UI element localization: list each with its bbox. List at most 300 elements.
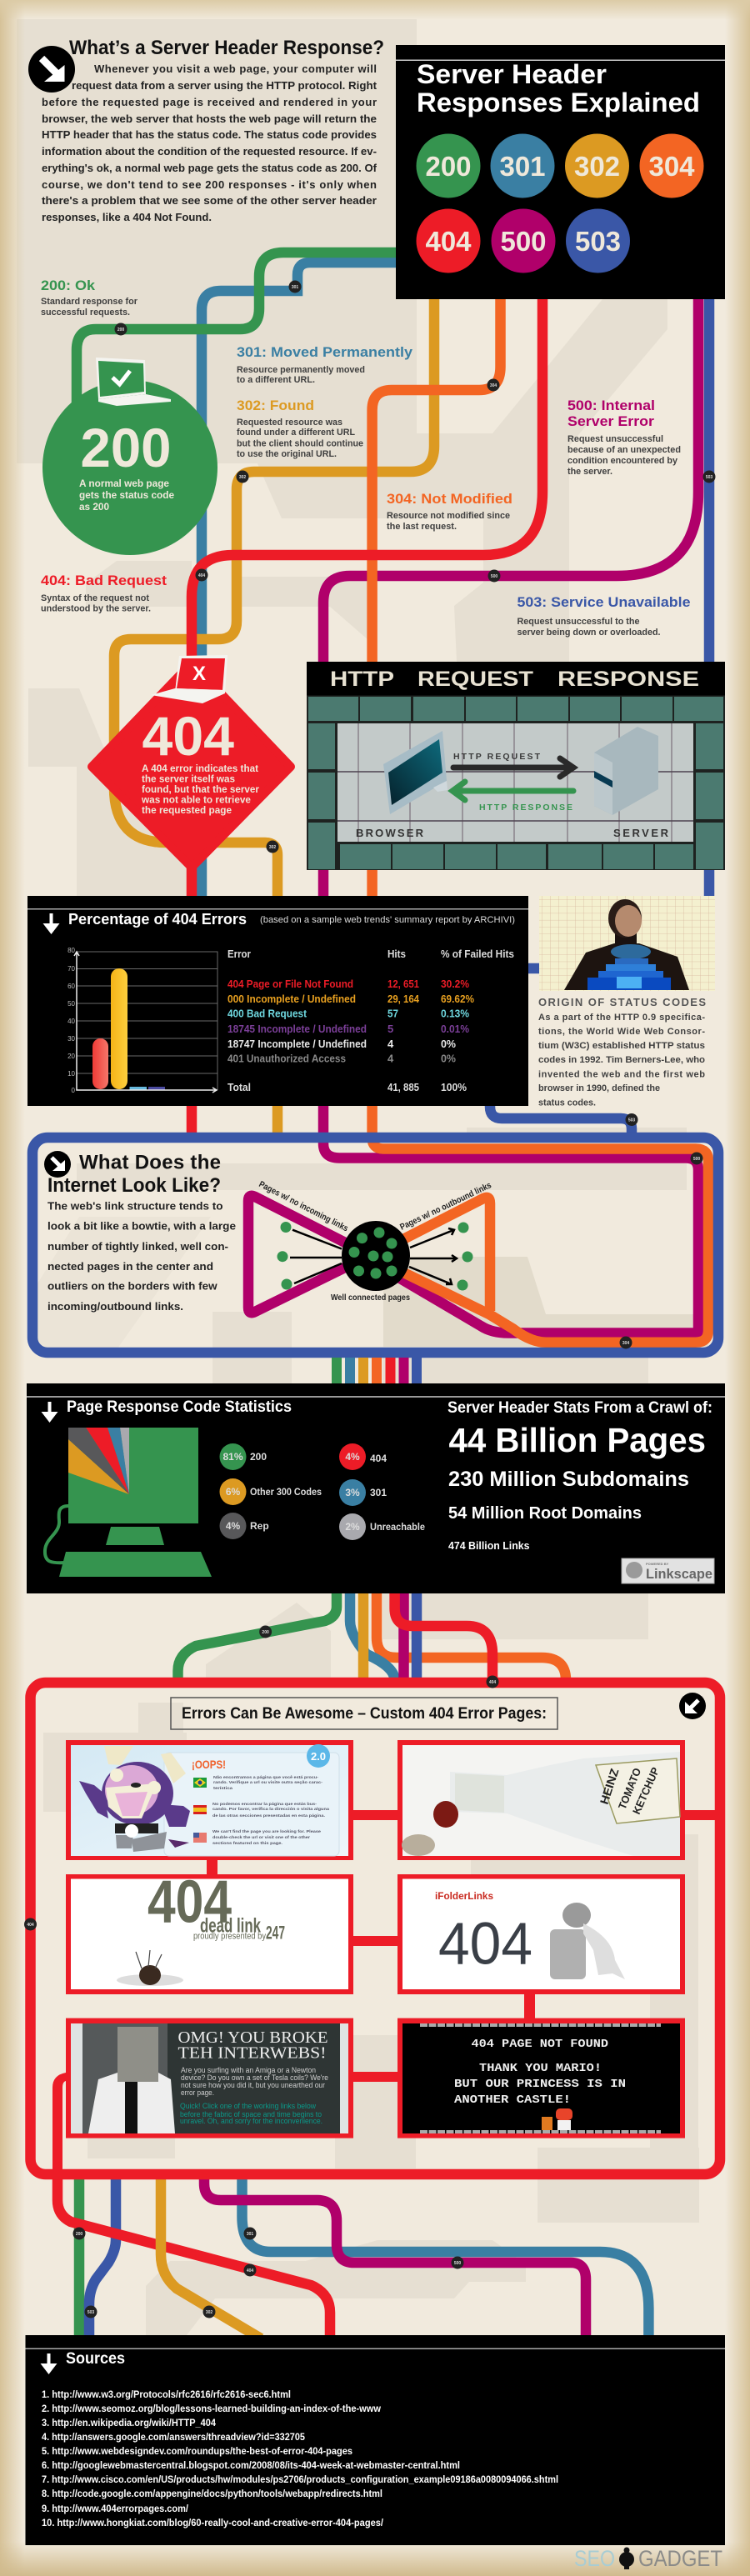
text block: 302 found: found under a different URL	[237, 428, 355, 438]
bar chart: 20	[68, 1053, 76, 1060]
text block: 304 not modified: 304: Not Modified	[387, 491, 512, 507]
data table: 30.2%	[441, 978, 469, 990]
text block: 301 moved permanently: Resource permanently moved	[237, 365, 365, 375]
station 200 mid: 200	[262, 1630, 269, 1635]
badge 500	[492, 208, 555, 273]
source list: 2. http://www.seomoz.org/blog/lessons-learned-building-an-index-of-the-www	[42, 2403, 382, 2414]
station 503 top	[703, 470, 715, 483]
icon: down-left arrow circle	[679, 1693, 706, 1719]
subway line: 500 magenta section	[323, 296, 698, 1333]
station 302 lower	[203, 2305, 215, 2318]
station 404 lower	[243, 2263, 257, 2277]
source list: 9. http://www.404errorpages.com/	[42, 2503, 189, 2514]
data table: 0%	[441, 1052, 456, 1065]
tile border	[308, 697, 723, 869]
intro body text: responses, like a 404 Not Found.	[42, 211, 212, 223]
paragraph	[181, 2066, 328, 2098]
data table: 401 Unauthorized Access	[228, 1052, 346, 1065]
logo: SEO Gadget: GADGET	[638, 2546, 722, 2571]
teal paragraph: Quick! Click one of the working links below	[180, 2102, 316, 2111]
icon: down arrow	[42, 1402, 58, 1423]
legend: rep: 4%	[226, 1520, 241, 1532]
text block: 301 moved permanently	[237, 344, 413, 385]
text: Spanish: de las otras secciones presentadas en esta página.	[212, 1813, 325, 1818]
station 404 lower: 404	[247, 2268, 253, 2273]
legend: 404: 4%	[345, 1451, 360, 1463]
subway line: 200 green top section	[77, 253, 400, 417]
badge 503: 503	[575, 226, 621, 257]
data table: 57	[388, 1007, 398, 1020]
data table: 404 Page or File Not Found	[228, 978, 353, 990]
stat: links: 474 Billion Links	[448, 1539, 530, 1552]
text block: 200 ok: 200: Ok	[41, 278, 96, 293]
text: Portuguese	[213, 1775, 323, 1790]
station 500 in frame: 500	[693, 1157, 700, 1162]
bar chart: 60	[68, 983, 76, 990]
text: Portuguese: terística	[213, 1786, 233, 1790]
data table: Error	[228, 948, 251, 960]
text block: 304 not modified: Resource not modified since	[387, 511, 510, 521]
intro body text: course, we don't tend to see 200 responses - it's only when	[42, 178, 377, 191]
logo: linkscape	[622, 1558, 714, 1583]
intro body text: browser, the web server that hosts the web page will return the	[42, 113, 377, 125]
arrow: http response	[452, 782, 573, 813]
panel heading: REQUEST	[418, 668, 533, 691]
icon: down-right arrow circle	[28, 46, 75, 93]
sprites: mario and toad	[542, 2108, 572, 2130]
source list: 8. http://code.google.com/appengine/docs/python/tools/webapp/redirects.html	[42, 2488, 382, 2499]
image: mario princess castle: 404 PAGE NOT FOUND	[472, 2038, 608, 2051]
section body text	[48, 1200, 236, 1313]
bottle cap	[402, 1834, 435, 1856]
label: well connected: Well connected pages	[331, 1293, 410, 1303]
section body text: The web's link structure tends to	[48, 1200, 223, 1212]
bar chart: 0	[72, 1087, 76, 1094]
station 200 top	[115, 323, 127, 335]
source list: 3. http://en.wikipedia.org/wiki/HTTP_404	[42, 2417, 216, 2428]
source list	[42, 2388, 558, 2528]
panel: server header responses explained	[396, 45, 725, 299]
image: monster error page	[66, 1740, 353, 1860]
station 404 on frame top	[487, 1675, 498, 1688]
text block: 500 internal server error: the server.	[568, 467, 612, 477]
image: heinz ketchup bottle	[398, 1740, 685, 1860]
bar chart: 80	[68, 947, 76, 954]
legend: 301: 301	[370, 1487, 387, 1498]
image: dead link 404 fly: 247	[266, 1922, 285, 1943]
image: iFolderLinks 404 baby: 404	[438, 1912, 532, 1977]
text block: 304 not modified: the last request.	[387, 522, 457, 532]
chart: monitor pie	[45, 1428, 212, 1577]
left arrows	[290, 1230, 342, 1283]
headline line two: TEH INTERWEBS!	[178, 2043, 327, 2062]
intro body text	[42, 63, 378, 223]
legend: unreachable	[339, 1513, 425, 1540]
icon: rider silhouette	[619, 2547, 634, 2569]
intro: what's a server header response	[28, 37, 384, 223]
flag: USA	[193, 1833, 207, 1843]
text: Portuguese: Não encontramos a página que você está procu-	[213, 1775, 319, 1779]
station 301 top	[288, 280, 302, 293]
text: English	[212, 1829, 322, 1845]
intro body text: Whenever you visit a web page, your computer will	[94, 63, 377, 75]
station 304 in frame	[620, 1337, 632, 1348]
callout: red 404 diamond with laptop	[92, 655, 291, 868]
text block: 301 moved permanently: to a different URL.	[237, 375, 315, 385]
data table	[228, 948, 514, 1093]
text block: 200 ok: successful requests.	[41, 308, 130, 318]
subway line: 503 blue section	[704, 296, 714, 900]
text block: origin of status codes: tium (W3C) established HTTP status	[538, 1041, 705, 1051]
text block: origin of status codes: tions, the World Wide Web Consor-	[538, 1027, 705, 1037]
icon: down arrow	[43, 913, 60, 934]
icon: laptop with check	[96, 358, 171, 406]
station 200 top: 200	[118, 328, 124, 333]
text: Spanish	[212, 1802, 330, 1818]
badge 302	[565, 133, 629, 198]
stat: subdomains: 230 Million Subdomains	[448, 1468, 689, 1491]
data table: Hits	[388, 948, 406, 960]
source list: 10. http://www.hongkiat.com/blog/60-really-cool-and-creative-error-404-pages/	[42, 2517, 384, 2528]
lines below stats panel	[178, 1588, 566, 1680]
station 500 in frame	[690, 1152, 703, 1165]
legend: other 300	[220, 1478, 322, 1505]
data table: 000 Incomplete / Undefined	[228, 993, 356, 1005]
icon: browser monitor	[383, 731, 448, 814]
panel heading	[330, 668, 699, 691]
arrow: http response: HTTP RESPONSE	[479, 803, 572, 813]
text block: 302 found: to use the original URL.	[237, 449, 337, 459]
section heading	[48, 1152, 221, 1197]
heading: sources: Sources	[66, 2350, 125, 2368]
illustration: purple monster	[79, 1746, 190, 1852]
panel: custom 404 error pages frame	[24, 1675, 720, 2179]
arrow: http request	[453, 752, 573, 777]
text: English: double-check the url or visit one of the other	[212, 1835, 310, 1839]
callout: green 200 circle with laptop: 200	[80, 417, 172, 478]
callout: red 404 diamond with laptop: 404	[142, 705, 234, 767]
callout: red 404 diamond with laptop: the server itself was	[142, 773, 235, 785]
panel: percentage of 404 errors	[28, 896, 528, 1106]
panel title	[417, 59, 700, 118]
text block: origin of status codes: invented the web and the first web	[538, 1070, 705, 1080]
text block: 404 bad request	[41, 573, 167, 613]
text block: 404 bad request: understood by the server.	[41, 603, 151, 613]
station 301 lower: 301	[247, 2232, 253, 2237]
text block: 200 ok: Standard response for	[41, 297, 138, 307]
data table: % of Failed Hits	[441, 948, 514, 960]
station 302 top: 302	[239, 475, 246, 480]
badge 301	[490, 133, 555, 198]
legend: rep	[220, 1513, 269, 1539]
station 302 top	[237, 470, 248, 483]
text: Portuguese: rando. Verifique a url ou visite outra seção carac-	[213, 1780, 323, 1784]
station 200 mid	[259, 1625, 272, 1638]
bar chart: 70	[68, 965, 76, 973]
callout: red 404 diamond with laptop: was not able to retrieve	[141, 793, 251, 805]
badge 304: 304	[648, 151, 695, 182]
lines below red frame	[58, 2177, 648, 2338]
text block: 500 internal server error	[568, 398, 681, 477]
image: dead link 404 fly: dead link	[200, 1915, 261, 1938]
title box: Errors Can Be Awesome – Custom 404 Error Pages:	[182, 1705, 547, 1723]
light tile field	[338, 723, 693, 842]
station 500 lower: 500	[454, 2261, 461, 2266]
text block: 302 found	[237, 398, 363, 459]
text block: 500 internal server error: because of an unexpected	[568, 445, 681, 455]
text block: 503 service unavailable: server being down or overloaded.	[517, 628, 660, 638]
legend: 301: 3%	[345, 1487, 360, 1498]
right arrows	[409, 1228, 457, 1284]
station 500 top: 500	[491, 574, 498, 579]
data table: 5	[388, 1023, 393, 1035]
flag: Spain	[193, 1805, 207, 1814]
image: dead link 404 fly: proudly presented by	[193, 1932, 266, 1942]
data table: 29, 164	[388, 993, 420, 1005]
intro body text: information about the condition of the requested resource. If ev-	[42, 145, 377, 158]
station 304 top: 304	[490, 383, 497, 388]
callout: red 404 diamond with laptop: A 404 error indicates that	[142, 763, 258, 774]
station 503 top: 503	[706, 475, 712, 480]
label: server: SERVER	[613, 827, 669, 839]
station 503 on frame: 503	[628, 1118, 635, 1123]
text block: 304 not modified	[387, 491, 512, 532]
callout: green 200 circle with laptop: as 200	[79, 501, 109, 513]
text block: 500 internal server error: Server Error	[568, 413, 654, 429]
core circle	[342, 1221, 410, 1291]
data table: 0.01%	[441, 1023, 469, 1035]
station 503 lower: 503	[88, 2310, 94, 2315]
station 503 on frame	[625, 1113, 638, 1126]
data table: 12, 651	[388, 978, 419, 990]
subway line: 503 blue stub behind photo	[523, 963, 542, 973]
teal paragraph: before the fabric of space and time begins to	[180, 2110, 322, 2119]
text block: 302 found: but the client should continue	[237, 438, 363, 448]
station 404 on frame top: 404	[489, 1680, 496, 1685]
legend: unreachable: 2%	[345, 1521, 360, 1533]
icon: small arrow circle	[44, 1151, 71, 1178]
heading: crawl stats: Server Header Stats From a Crawl of:	[448, 1399, 712, 1417]
station 200 lower: 200	[76, 2232, 82, 2237]
title box	[171, 1698, 558, 1729]
legend: unreachable: Unreachable	[370, 1521, 425, 1533]
text block: 500 internal server error: condition encountered by	[568, 456, 678, 466]
text block: origin of status codes: status codes.	[538, 1098, 596, 1108]
icon: laptop with X: X	[192, 663, 206, 685]
logo: linkscape: Linkscape	[646, 1566, 712, 1582]
text block: 503 service unavailable: 503: Service Unavailable	[517, 594, 690, 610]
image: mario princess castle	[398, 2018, 685, 2138]
subway line: 301 teal top section	[202, 263, 400, 900]
legend: 404	[339, 1443, 387, 1470]
station 404 on frame left: 404	[27, 1923, 34, 1928]
data table: 0.13%	[441, 1007, 469, 1020]
connectors between image frames	[52, 1810, 715, 2179]
logo: linkscape: POWERED BY	[646, 1562, 669, 1566]
intro body text: request data from a server using the HTTP protocol. Right	[72, 79, 378, 92]
diagram: bowtie	[248, 1179, 493, 1313]
arrow: http request: HTTP REQUEST	[453, 752, 541, 762]
icon: down arrow	[40, 2353, 57, 2374]
panel: sources	[25, 2335, 725, 2545]
text block: origin of status codes: ORIGIN OF STATUS CODES	[538, 996, 706, 1008]
label text: Tomato: TOMATO	[616, 1766, 643, 1811]
text block: 404 bad request: Syntax of the request not	[41, 593, 149, 603]
intro heading: What’s a Server Header Response?	[69, 37, 384, 59]
bar chart: 10	[68, 1070, 76, 1078]
text: English: sections featured on this page.	[212, 1841, 282, 1845]
legend: 404: 404	[370, 1453, 387, 1464]
text block: 503 service unavailable	[517, 594, 690, 638]
station 302 lower: 302	[269, 845, 276, 850]
stat: 44 billion pages: 44 Billion Pages	[448, 1421, 706, 1459]
legend: 200: 200	[250, 1451, 267, 1463]
ketchup spill	[433, 1801, 458, 1828]
station 301 lower	[243, 2227, 257, 2240]
text block: 302 found: 302: Found	[237, 398, 314, 413]
station 503 lower	[85, 2305, 97, 2318]
illustration: dead fly	[117, 1950, 183, 1986]
source list: 6. http://googlewebmastercentral.blogspot.com/2008/08/its-404-week-at-webmaster-central.html	[42, 2459, 460, 2471]
subway line: 304 orange section	[372, 296, 708, 1343]
station 500 lower	[452, 2257, 463, 2268]
panel heading: RESPONSE	[558, 668, 699, 691]
text block: 404 bad request: 404: Bad Request	[41, 573, 167, 588]
image: OMG you broke teh interwebs	[66, 2018, 353, 2138]
panel: page response code statistics	[27, 1383, 725, 1593]
image: dead link 404 fly: 404	[148, 1868, 232, 1935]
intro body text: before the requested page is received and rendered in your	[42, 96, 377, 108]
image: dead link 404 fly	[66, 1868, 353, 1994]
data table: 18747 Incomplete / Undefined	[228, 1038, 367, 1050]
source list: 7. http://www.cisco.com/en/US/products/hw/modules/ps2706/products_configuration_example09186a0080094066.shtml	[42, 2473, 558, 2485]
source list: 4. http://answers.google.com/answers/threadview?id=332705	[42, 2431, 305, 2443]
station 302 lower	[267, 840, 278, 853]
illustration: paper bag man	[88, 2027, 175, 2133]
legend: rep: Rep	[250, 1520, 269, 1532]
subway line: 503 blue loop to frame	[490, 1100, 632, 1135]
text block: 301 moved permanently: 301: Moved Permanently	[237, 344, 413, 360]
page dots	[277, 1222, 473, 1290]
subway line: 302 gold top section	[114, 296, 434, 1135]
section body text: look a bit like a bowtie, with a large	[48, 1220, 236, 1233]
badge 302: 302	[574, 151, 620, 182]
badge 503	[566, 208, 630, 273]
station 404 on frame left	[24, 1918, 37, 1930]
text block: 302 found: Requested resource was	[237, 418, 342, 428]
seven lines connecting frame to stats panel	[337, 1358, 417, 1388]
note: (based on a sample web trends' summary report by ARCHIVI)	[260, 915, 515, 925]
stat: root domains: 54 Million Root Domains	[448, 1504, 642, 1523]
intro body text: erything's ok, a normal web page gets the status code as 200. Of	[42, 162, 378, 174]
callout: red 404 diamond with laptop: the requested page	[142, 804, 232, 816]
text block: origin of status codes	[538, 996, 706, 1108]
badge 200	[417, 133, 480, 198]
label: no incoming: Pages w/ no incoming links	[258, 1179, 350, 1233]
badge 2.0	[307, 1744, 330, 1768]
heading: page response stats: Page Response Code Statistics	[67, 1398, 292, 1416]
image: iFolderLinks 404 baby: iFolderLinks	[435, 1890, 493, 1902]
badge 500: 500	[500, 226, 547, 257]
section body text: number of tightly linked, well con-	[48, 1240, 228, 1253]
badge 404	[417, 208, 480, 273]
paragraph: error page.	[181, 2088, 214, 2098]
legend: 301	[339, 1479, 387, 1506]
station 304 top	[487, 378, 500, 392]
callout: green 200 circle with laptop: A normal web page	[79, 478, 169, 489]
data table: 18745 Incomplete / Undefined	[228, 1023, 367, 1035]
text block: origin of status codes: codes in 1992. Tim Berners-Lee, who	[538, 1055, 705, 1065]
intro body text: HTTP header that has the status code. The status code provides	[42, 128, 377, 141]
teal paragraph	[180, 2102, 322, 2126]
text: Spanish: cando. Por favor, verifica la dirección o visita alguna	[212, 1807, 330, 1811]
image: OMG you broke teh interwebs: OMG! YOU BROKE	[178, 2028, 328, 2047]
paragraph: device? Do you own a set of Tesla coils? We're	[181, 2073, 328, 2083]
text block: 200 ok	[41, 278, 138, 318]
icon: server tower	[594, 727, 658, 815]
label: browser: BROWSER	[356, 827, 424, 839]
text block: 500 internal server error: 500: Internal	[568, 398, 655, 413]
badge 404: 404	[425, 226, 472, 257]
text block: 503 service unavailable: Request unsuccessful to the	[517, 617, 640, 627]
badge 200: 200	[425, 151, 472, 182]
heading: oops: ¡OOPS!	[192, 1758, 226, 1771]
station 404 top: 404	[198, 573, 205, 578]
station 500 top	[488, 570, 500, 582]
section body text: outliers on the borders with few	[48, 1280, 218, 1293]
text block: 500 internal server error: Request unsuccessful	[568, 434, 663, 444]
section body text: nected pages in the center and	[48, 1260, 213, 1273]
station 404 top	[195, 568, 208, 582]
teal paragraph: unravel. Oh, and sorry for the inconvenience.	[180, 2117, 322, 2126]
bar chart: 30	[68, 1035, 76, 1043]
image: iFolderLinks 404 baby	[398, 1874, 685, 1994]
legend: other 300: Other 300 Codes	[250, 1486, 322, 1498]
icon: laptop with X	[151, 655, 228, 703]
logo: SEO Gadget	[574, 2546, 722, 2571]
label text: Heinz: HEINZ	[598, 1767, 622, 1806]
data table: 0%	[441, 1038, 456, 1050]
bar chart: 40	[68, 1018, 76, 1025]
text: English: We can't find the page you are looking for. Please	[212, 1829, 322, 1833]
flag: Brazil	[193, 1778, 207, 1788]
callout: red 404 diamond with laptop: found, but that the server	[142, 783, 259, 795]
image: mario princess castle: BUT OUR PRINCESS IS IN	[454, 2078, 626, 2091]
paragraph: not sure how you did it, but you unearthed our	[181, 2081, 325, 2090]
source list: 1. http://www.w3.org/Protocols/rfc2616/rfc2616-sec6.html	[42, 2388, 291, 2400]
section heading: What Does the	[79, 1152, 221, 1174]
legend: other 300: 6%	[226, 1486, 241, 1498]
section heading: Internet Look Like?	[48, 1174, 221, 1197]
label text: Ketchup: KETCHUP	[630, 1765, 662, 1816]
badge 301: 301	[499, 151, 546, 182]
source list: 5. http://www.webdesigndev.com/roundups/the-best-of-error-404-pages	[42, 2445, 352, 2457]
panel title: Responses Explained	[417, 88, 700, 118]
data table: 400 Bad Request	[228, 1007, 308, 1020]
panel: what does the internet look like frame	[32, 1113, 718, 1353]
bar chart	[68, 947, 218, 1094]
photo: Tim Berners-Lee on grid	[539, 896, 715, 991]
data table: 41, 885	[388, 1081, 419, 1093]
intro body text: there's a problem that we see some of the other server header	[42, 194, 377, 207]
panel: HTTP request response tile sign	[307, 662, 725, 870]
station 301 top: 301	[292, 285, 298, 290]
data table: 100%	[441, 1081, 467, 1093]
station 304 in frame: 304	[622, 1341, 629, 1346]
logo: SEO Gadget: SEO	[574, 2546, 615, 2571]
callout: green 200 circle with laptop: gets the status code	[79, 489, 174, 501]
station 200 lower	[73, 2227, 85, 2240]
